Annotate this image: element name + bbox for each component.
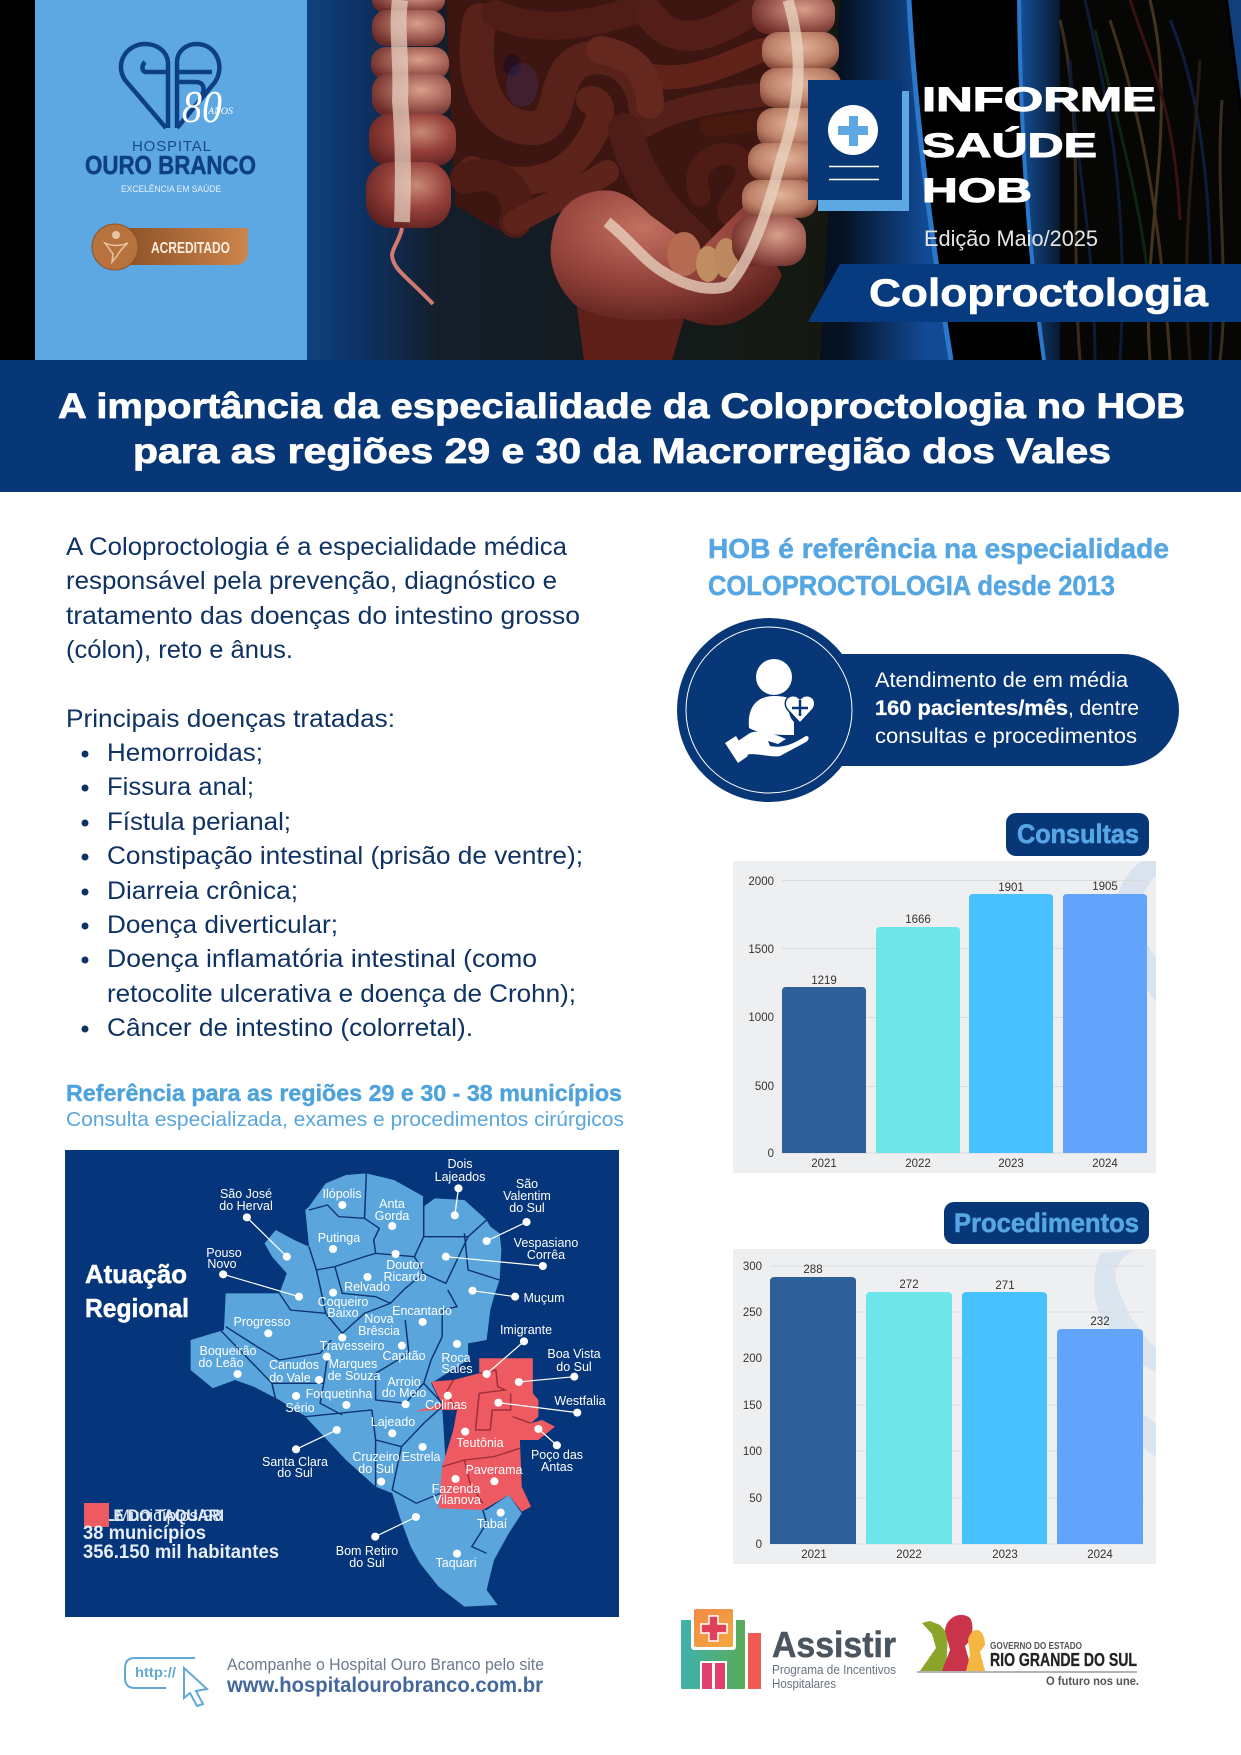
municipality labels: Novo — [207, 1257, 237, 1271]
municipality labels: do Herval — [219, 1199, 273, 1213]
regional reference heading: Referência para as regiões 29 e 30 - 38 municípios — [66, 1080, 622, 1106]
municipality labels: Coqueiro — [318, 1295, 368, 1309]
map title: Atuação — [85, 1259, 187, 1289]
hospital name top line: HOSPITAL — [132, 138, 211, 155]
municipality labels: Gorda — [375, 1209, 409, 1223]
axis labels: 500 — [755, 1081, 774, 1093]
municipality labels: Forquetinha — [306, 1387, 372, 1401]
map legend: 356.150 mil habitantes — [83, 1542, 279, 1563]
municipality labels: Dois — [447, 1157, 473, 1171]
callout text: 160 pacientes/mês — [875, 697, 1068, 720]
treated diseases list: Constipação intestinal (prisão de ventre); — [107, 842, 583, 870]
descending colon with band — [607, 0, 841, 288]
hospital name main line: OURO BRANCO — [85, 150, 256, 180]
treated diseases list: Hemorroidas; — [107, 739, 263, 767]
bar values: 1219 — [811, 975, 837, 987]
municipality labels: Lajeados — [435, 1170, 485, 1184]
footer url: www.hospitalourobranco.com.br — [226, 1674, 543, 1697]
map title — [85, 1259, 189, 1323]
municipality labels: Brêscia — [358, 1324, 400, 1338]
municipality labels: do Sul — [277, 1466, 313, 1480]
bulletin title — [922, 81, 1156, 210]
municipality labels: Boa Vista — [547, 1347, 601, 1361]
municipality labels: Vespasiano — [514, 1236, 578, 1250]
axis labels: 0 — [768, 1148, 774, 1160]
municipality labels: Santa Clara — [262, 1455, 328, 1469]
logo anniversary mark: 80 — [182, 81, 222, 132]
axis labels: 150 — [743, 1400, 762, 1412]
municipality labels: do Sul — [358, 1462, 394, 1476]
municipality labels: Sales — [441, 1362, 473, 1376]
procedimentos tag: Procedimentos — [954, 1208, 1139, 1238]
municipality labels: do Vale — [269, 1371, 311, 1385]
headline band — [0, 360, 1241, 492]
accreditation badge — [92, 224, 248, 270]
municipality labels: Corrêa — [527, 1248, 565, 1262]
bar values: 271 — [995, 1280, 1015, 1292]
callout text: , dentre — [1068, 697, 1139, 720]
logo: Governo do Rio Grande do Sul: RIO GRANDE DO SUL — [990, 1650, 1137, 1670]
axis labels: 0 — [756, 1539, 762, 1551]
municipality labels: Doutor — [386, 1258, 424, 1272]
bar values — [811, 881, 1118, 987]
icon: browser cursor — [125, 1658, 207, 1706]
reference since 2013 heading: HOB é referência na especialidade — [708, 533, 1169, 564]
axis labels — [743, 1261, 1113, 1561]
bar values: 1901 — [998, 882, 1024, 894]
map legend: 38 municípios — [83, 1523, 206, 1544]
municipality labels: Nova — [364, 1312, 394, 1326]
municipality labels: Estrela — [402, 1450, 440, 1464]
map legend — [83, 1503, 279, 1563]
municipality labels: Imigrante — [500, 1323, 552, 1337]
logo: heart with cross — [121, 44, 219, 128]
treated diseases list: Câncer de intestino (colorretal). — [107, 1014, 473, 1042]
bar chart: consultas — [733, 855, 1180, 1173]
edition line: Edição Maio/2025 — [924, 226, 1098, 251]
axis labels: 50 — [749, 1493, 762, 1505]
treated diseases list: Principais doenças tratadas: — [66, 705, 395, 733]
municipality labels: Roca — [441, 1351, 471, 1365]
municipality labels: Ilópolis — [323, 1187, 361, 1201]
treated diseases list: retocolite ulcerativa e doença de Crohn); — [107, 980, 576, 1008]
treated diseases list: Fístula perianal; — [107, 808, 291, 836]
axis labels: 250 — [743, 1307, 762, 1319]
consultas tag: Consultas — [1017, 819, 1139, 849]
patients callout — [677, 618, 1179, 802]
intro paragraph: A Coloproctologia é a especialidade médica — [66, 533, 567, 561]
axis labels: 2023 — [992, 1549, 1018, 1561]
icon: hand holding person with heart — [725, 659, 815, 763]
municipality labels: Ricardo — [383, 1270, 427, 1284]
bar values: 272 — [899, 1279, 919, 1291]
municipality labels: Westfalia — [554, 1394, 606, 1408]
municipality labels: Cruzeiro — [352, 1450, 400, 1464]
axis labels: 1000 — [748, 1012, 774, 1024]
rectum and sigmoid colon — [551, 190, 782, 360]
bar values: 1905 — [1092, 881, 1118, 893]
hospital identity panel — [35, 0, 307, 360]
axis labels: 2023 — [998, 1158, 1024, 1170]
header photo: anatomy of the colon — [0, 0, 1241, 360]
logo: Governo do Rio Grande do Sul — [917, 1615, 1139, 1688]
axis labels: 1500 — [748, 944, 774, 956]
consultas tag — [1006, 813, 1149, 856]
municipality labels: Vilanova — [433, 1493, 481, 1507]
small intestine — [446, 0, 775, 248]
bulletin title: INFORME — [922, 81, 1156, 119]
bars — [782, 894, 1147, 1153]
axis labels: 2024 — [1087, 1549, 1113, 1561]
municipality labels: Pouso — [206, 1246, 242, 1260]
municipality labels: Progresso — [234, 1315, 291, 1329]
bar chart: procedimentos — [733, 1249, 1156, 1564]
intro paragraph: tratamento das doenças do intestino grosso — [66, 602, 580, 630]
bars — [770, 1277, 1143, 1544]
logo: Assistir programme — [681, 1607, 896, 1691]
intro paragraph: (cólon), reto e ânus. — [66, 636, 293, 664]
intro paragraph — [66, 533, 580, 664]
municipality labels: Antas — [541, 1460, 573, 1474]
municipality labels: Canudos — [269, 1358, 319, 1372]
callout text — [875, 669, 1139, 748]
map title: Regional — [85, 1293, 189, 1323]
icon: browser cursor: http:// — [135, 1664, 176, 1680]
municipality labels: do Leão — [198, 1356, 244, 1370]
map of municipalities — [191, 1173, 581, 1607]
municipality labels: Valentim — [503, 1189, 551, 1203]
headline band: A importância da especialidade da Coloproctologia no HOB — [58, 387, 1185, 426]
municipality labels: Lajeado — [371, 1415, 415, 1429]
municipality labels: Boqueirão — [200, 1344, 257, 1358]
axis labels: 2022 — [905, 1158, 931, 1170]
intro paragraph: responsável pela prevenção, diagnóstico e — [66, 567, 557, 595]
municipality labels: do Meio — [382, 1386, 426, 1400]
axis labels — [748, 876, 1118, 1170]
regional reference subheading: Consulta especializada, exames e procedimentos cirúrgicos — [66, 1109, 624, 1131]
callout text: Atendimento de em média — [875, 669, 1128, 692]
logo: Governo do Rio Grande do Sul: GOVERNO DO ESTADO — [990, 1641, 1082, 1652]
reference since 2013 heading — [708, 533, 1169, 601]
axis labels: 2021 — [811, 1158, 837, 1170]
municipality labels: Putinga — [318, 1231, 360, 1245]
map legend: VALE DO TAQUARI — [84, 1506, 224, 1525]
municipality labels: Bom Retiro — [336, 1544, 398, 1558]
municipality labels: do Sul — [556, 1360, 592, 1374]
municipality labels: Colinas — [425, 1398, 467, 1412]
treated diseases list: Doença inflamatória intestinal (como — [107, 945, 537, 973]
municipality labels: Fazenda — [432, 1482, 480, 1496]
footer text: Acompanhe o Hospital Ouro Branco pelo site — [227, 1656, 544, 1674]
municipality labels: Baixo — [327, 1306, 359, 1320]
municipality labels: São — [516, 1177, 538, 1191]
reference since 2013 heading: COLOPROCTOLOGIA desde 2013 — [708, 570, 1115, 601]
municipality labels: Capitão — [382, 1349, 426, 1363]
treated diseases list: Doença diverticular; — [107, 911, 338, 939]
map legend: .Municípios/98 — [111, 1506, 222, 1525]
municipality labels: Tabaí — [477, 1517, 508, 1531]
ascending colon — [366, 0, 456, 304]
bar values: 288 — [803, 1264, 823, 1276]
municipality labels: Relvado — [344, 1280, 390, 1294]
regional map panel — [65, 1150, 619, 1617]
axis labels: 2022 — [896, 1549, 922, 1561]
municipality labels: Marques — [329, 1357, 377, 1371]
logo word anos: ANOS — [207, 106, 234, 116]
headline band: para as regiões 29 e 30 da Macrorregião dos Vales — [133, 432, 1111, 471]
municipality labels: Anta — [379, 1197, 405, 1211]
accreditation badge: ACREDITADO — [151, 240, 230, 257]
municipality labels: Arroio — [387, 1375, 421, 1389]
procedimentos tag — [944, 1202, 1149, 1244]
website footer — [125, 1656, 544, 1706]
municipality labels: do Sul — [509, 1201, 545, 1215]
logo: Assistir programme: Hospitalares — [772, 1676, 836, 1691]
municipality labels: São José — [220, 1187, 272, 1201]
municipality labels: Muçum — [524, 1291, 564, 1305]
bulletin title: SAÚDE — [922, 127, 1097, 165]
axis labels: 100 — [743, 1446, 762, 1458]
municipality labels: Paverama — [466, 1463, 523, 1477]
municipality labels: Encantado — [392, 1304, 452, 1318]
treated diseases list: Fissura anal; — [107, 773, 254, 801]
axis labels: 300 — [743, 1261, 762, 1273]
axis labels: 2024 — [1092, 1158, 1118, 1170]
treated diseases list: Diarreia crônica; — [107, 877, 298, 905]
logo: Assistir programme: Programa de Incentivos — [772, 1662, 896, 1677]
municipality labels: Poço das — [531, 1448, 583, 1462]
axis labels: 200 — [743, 1353, 762, 1365]
document icon — [808, 80, 909, 211]
specialty ribbon — [808, 264, 1241, 322]
axis labels: 2000 — [748, 876, 774, 888]
municipality labels: de Souza — [328, 1369, 380, 1383]
bar values: 1666 — [905, 914, 931, 926]
callout text: consultas e procedimentos — [875, 725, 1137, 748]
municipality labels: Travesseiro — [320, 1339, 384, 1353]
logo: Governo do Rio Grande do Sul: O futuro nos une. — [1046, 1676, 1139, 1688]
municipality labels: Sério — [285, 1401, 315, 1415]
logo: Assistir programme: Assistir — [772, 1624, 896, 1665]
municipality labels: Teutônia — [456, 1436, 504, 1450]
treated diseases list — [66, 705, 583, 1042]
municipality labels — [198, 1157, 606, 1570]
bar values: 232 — [1090, 1316, 1110, 1328]
municipality labels: Taquari — [436, 1556, 476, 1570]
specialty ribbon: Coloproctologia — [869, 272, 1208, 315]
municipality labels: do Sul — [349, 1556, 385, 1570]
bar values — [803, 1264, 1110, 1328]
axis labels: 2021 — [801, 1549, 827, 1561]
hospital tagline: EXCELÊNCIA EM SAÚDE — [121, 184, 221, 194]
bulletin title: HOB — [922, 172, 1032, 210]
